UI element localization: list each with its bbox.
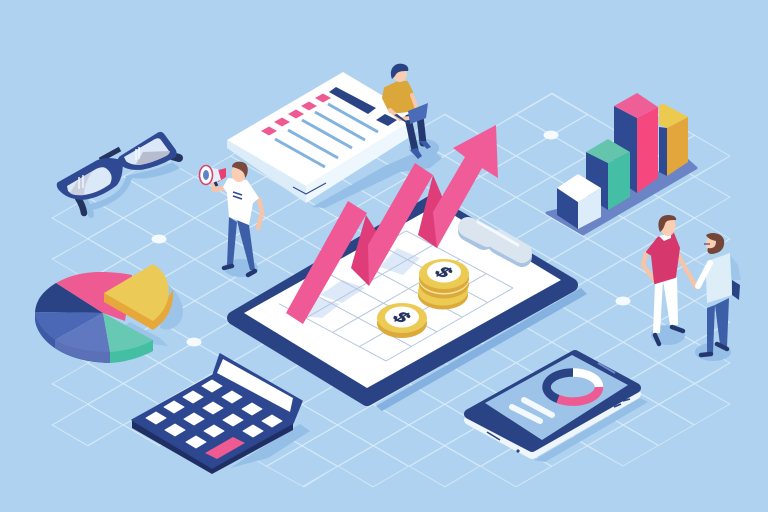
panel: document stack	[227, 72, 442, 208]
calculator screen	[217, 359, 293, 412]
head	[393, 66, 407, 82]
icon: calculator	[132, 354, 310, 474]
data grid	[279, 231, 513, 361]
arrow: rising trend	[286, 125, 498, 324]
screen pills	[512, 400, 552, 421]
shoes	[224, 266, 255, 275]
clipboard clip	[468, 222, 522, 257]
calculator keys	[146, 380, 282, 448]
green bar	[586, 139, 630, 210]
coin stack	[418, 259, 469, 310]
floor grid	[52, 93, 730, 487]
arms	[643, 253, 696, 287]
checklist lines	[275, 104, 378, 167]
chart: 3D pie	[35, 264, 183, 363]
icon: smartphone	[469, 355, 648, 462]
panel: tablet clipboard	[234, 202, 587, 411]
pie slices	[35, 283, 103, 313]
arms	[213, 182, 262, 228]
legs	[408, 116, 423, 150]
shoes	[701, 344, 727, 355]
coin: single	[377, 303, 427, 338]
megaphone	[215, 168, 226, 182]
person: man with glasses and folder	[695, 233, 741, 361]
person: megaphone speaker	[200, 162, 262, 277]
grid node dots	[152, 130, 630, 346]
white bar	[557, 174, 601, 229]
jeans	[227, 217, 255, 270]
laptop	[408, 103, 428, 124]
head	[660, 216, 676, 236]
white trousers	[653, 277, 678, 333]
yellow bar	[659, 104, 688, 176]
person: sitting with laptop	[383, 64, 439, 159]
calculator pink key	[205, 437, 245, 459]
shoes	[655, 327, 683, 344]
chart: 3D bars	[547, 93, 696, 234]
icon: glasses	[58, 133, 180, 215]
person: man in red shirt	[643, 215, 696, 345]
jeans	[707, 298, 729, 353]
header bars	[329, 87, 397, 126]
arm and shirt	[383, 82, 415, 112]
pink bar	[614, 93, 658, 193]
shirt	[223, 178, 259, 225]
shirt	[706, 253, 732, 303]
coin stack: $	[429, 264, 457, 281]
highlighted cells	[304, 248, 420, 318]
donut chart	[547, 372, 599, 402]
coin: single: $	[387, 309, 415, 326]
pie wedge	[104, 290, 173, 330]
chart base	[547, 160, 696, 234]
checklist pink squares	[261, 94, 331, 136]
head	[232, 164, 246, 182]
phone details	[598, 363, 615, 373]
pie side	[35, 312, 110, 363]
head	[706, 234, 722, 254]
phone screen	[485, 355, 628, 440]
folder	[732, 280, 740, 300]
red shirt	[647, 233, 679, 283]
